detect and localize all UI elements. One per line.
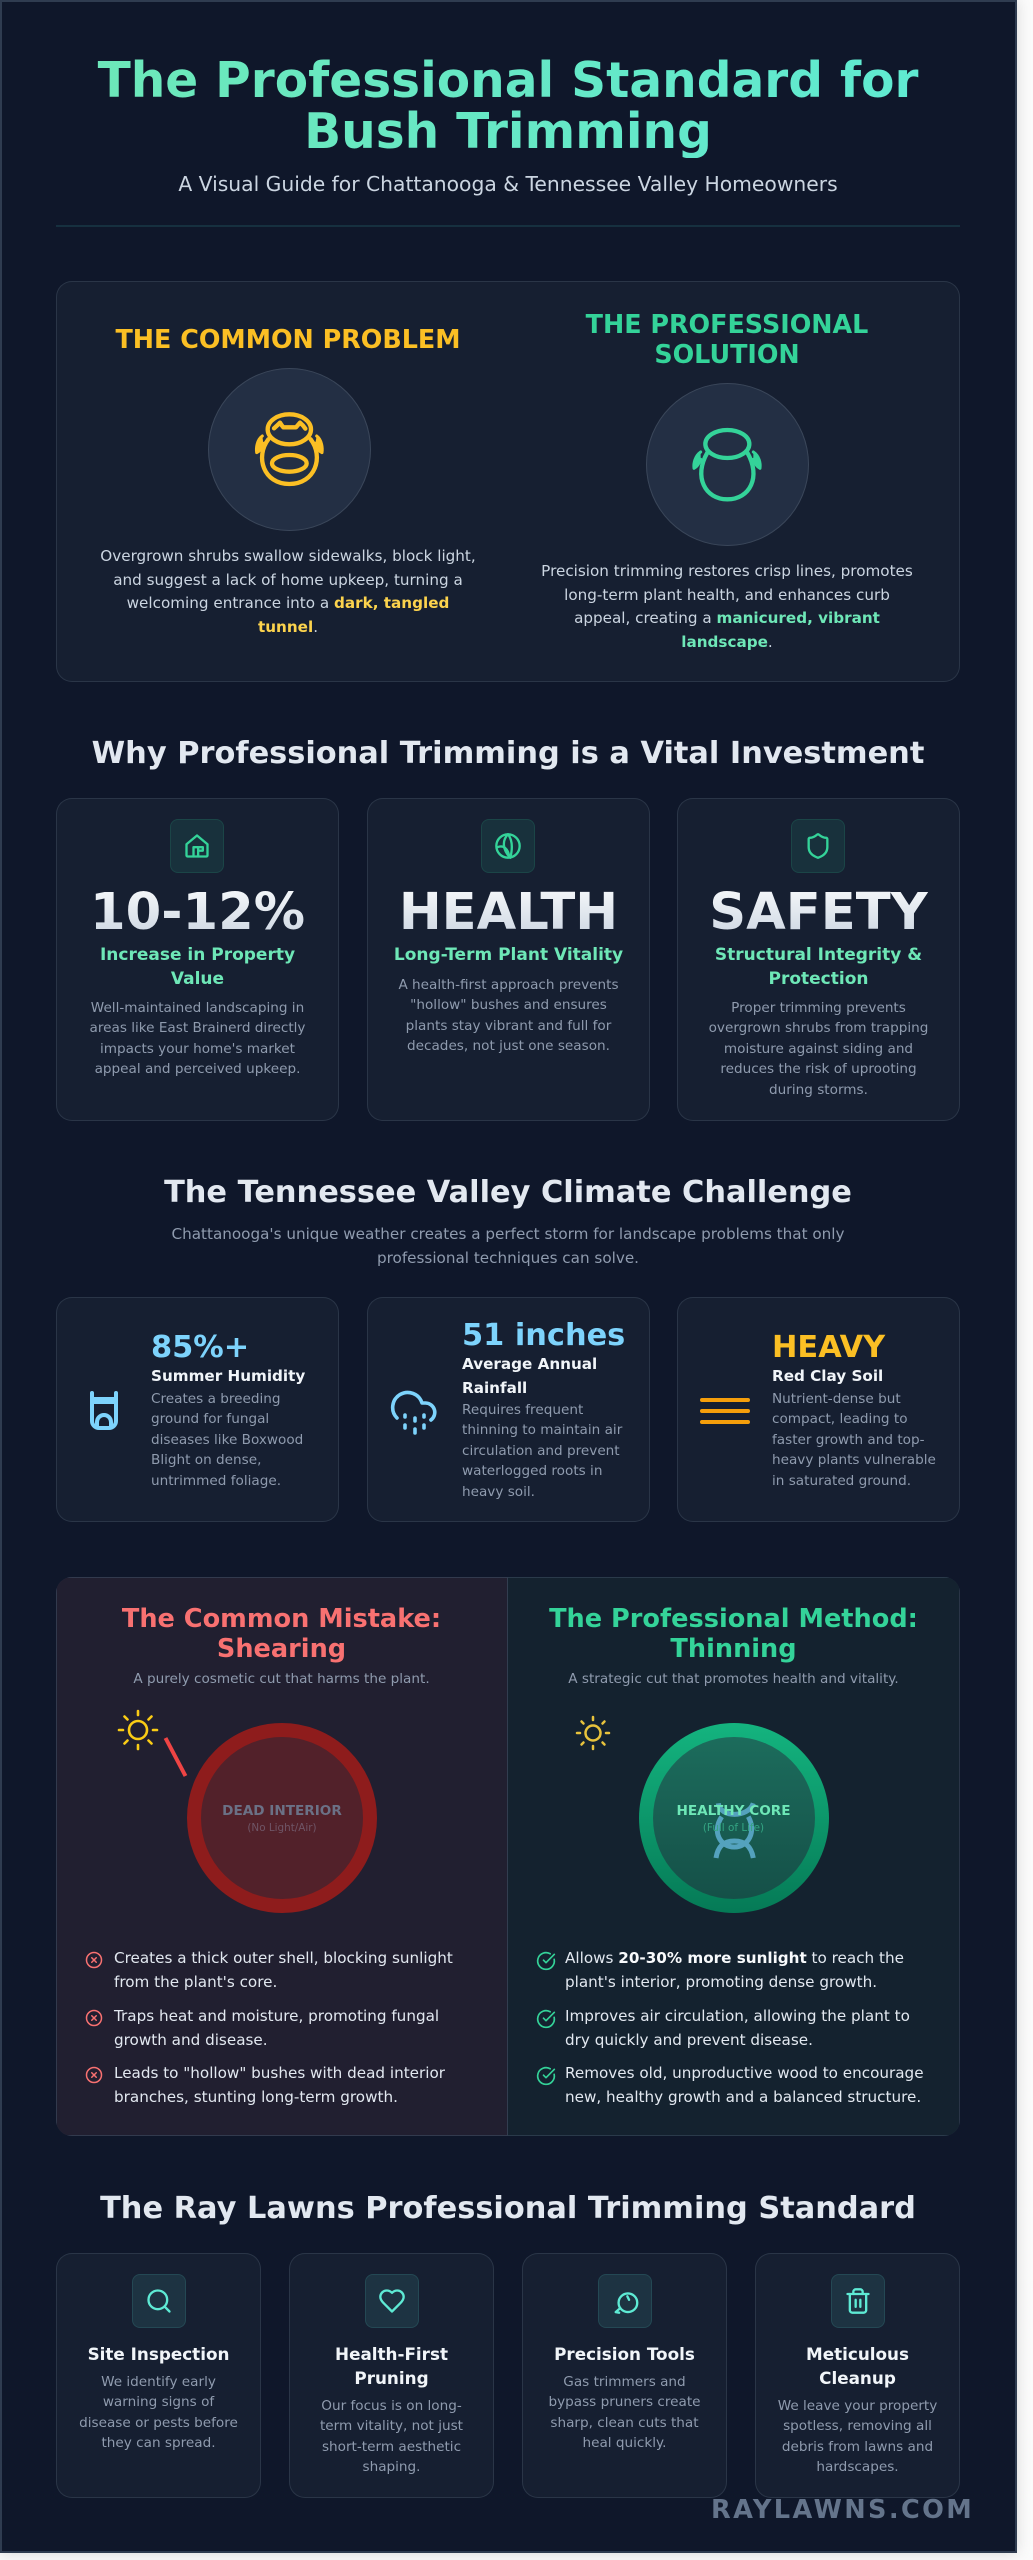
text: problem description: and suggest a lack of home upkeep, turning a (113, 571, 463, 589)
description (522, 2372, 727, 2454)
card: health (367, 798, 650, 1121)
description (398, 977, 619, 1054)
text: growth and disease. (114, 2030, 268, 2048)
icon: x (86, 1952, 102, 1968)
text (114, 2006, 439, 2048)
label: Structural Integrity & (715, 945, 922, 965)
panel: shearing vs thinning (56, 1577, 960, 2136)
description: warning signs of (103, 2394, 214, 2410)
description (709, 1000, 928, 1098)
text: solution description: landscape. (681, 633, 773, 651)
diagram sublabel: (Full of Life) (703, 1822, 764, 1834)
card: health-first pruning (289, 2253, 494, 2498)
description: bypass pruners create (548, 2394, 701, 2410)
item (86, 2064, 445, 2106)
icon: humidity (90, 1391, 118, 1430)
text: branches, stunting long-term growth. (114, 2088, 398, 2106)
text (114, 2064, 445, 2106)
label: Protection (768, 969, 868, 989)
item (536, 2064, 924, 2106)
icon: open branches (714, 1802, 756, 1858)
text: Removes old, unproductive wood to encourage (565, 2064, 924, 2082)
icon: check (536, 2066, 556, 2086)
icon: house (170, 819, 224, 873)
heading: thinning: Thinning (670, 1634, 797, 1664)
label: Rainfall (462, 1379, 527, 1397)
text: Creates a thick outer shell, blocking sunlight (114, 1949, 453, 1967)
description: shaping. (362, 2459, 420, 2475)
label: Precision Tools (554, 2344, 695, 2364)
text: problem description: tunnel. (258, 618, 318, 636)
description: decades, not just one season. (407, 1038, 610, 1054)
heading: climate challenge: The Tennessee Valley Climate Challenge (164, 1175, 852, 1210)
description (151, 1391, 303, 1489)
diagram label: DEAD INTERIOR (222, 1803, 342, 1819)
text: problem description: welcoming entrance into a dark, tangled (127, 594, 449, 612)
label: Value (171, 969, 224, 989)
subtitle: A purely cosmetic cut that harms the plant. (133, 1671, 430, 1687)
description (90, 1000, 305, 1077)
subtitle: A strategic cut that promotes health and vitality. (568, 1671, 899, 1687)
label: Increase in Property (100, 945, 295, 965)
heading: why professional trimming: Why Professional Trimming is a Vital Investment (92, 736, 924, 771)
icon: search (132, 2274, 186, 2328)
icon: leaf (481, 819, 535, 873)
description: compact, leading to (772, 1411, 908, 1427)
stat: 51 inches: 51 inches (462, 1318, 625, 1353)
text: climate intro: Chattanooga's unique weather creates a perfect storm for landscape problems that only (172, 1225, 844, 1243)
panel: problem vs solution (56, 281, 960, 682)
diagram: dead interior (187, 1723, 377, 1913)
description (755, 2396, 960, 2478)
diagram sublabel: (No Light/Air) (247, 1822, 317, 1834)
description: debris from lawns and (782, 2439, 933, 2455)
card: precision tools (522, 2253, 727, 2498)
heading: the professional solution: SOLUTION (654, 339, 800, 369)
description: heavy soil. (462, 1484, 535, 1500)
icon: trash (831, 2274, 885, 2328)
description: impacts your home's market (100, 1041, 295, 1057)
stat: 10-12%: 10-12% (90, 882, 305, 942)
description: We leave your property (778, 2398, 937, 2414)
label (715, 945, 922, 989)
label: Long-Term Plant Vitality (394, 945, 623, 965)
icon: soil layers (700, 1398, 750, 1424)
heading: shearing: The Common Mistake: (122, 1604, 441, 1634)
card: site inspection (56, 2253, 261, 2498)
card: rainfall (367, 1297, 650, 1522)
description (772, 1391, 936, 1489)
item (86, 2006, 439, 2048)
text (114, 1949, 453, 1991)
icon: check (536, 2010, 556, 2028)
description: short-term aesthetic (322, 2439, 461, 2455)
description: Our focus is on long- (321, 2398, 462, 2414)
label: Summer Humidity (151, 1367, 305, 1385)
heading: the professional solution (586, 309, 868, 369)
description: faster growth and top- (772, 1432, 924, 1448)
heading: shearing (122, 1604, 441, 1664)
heading: ray lawns standard: The Ray Lawns Professional Trimming Standard (100, 2191, 916, 2226)
description: during storms. (769, 1082, 868, 1098)
heading: shearing: Shearing (217, 1634, 346, 1664)
item (536, 1949, 904, 1991)
icon: overgrown bush (208, 368, 371, 531)
description: circulation and prevent (462, 1443, 620, 1459)
title: Bush Trimming (304, 104, 712, 160)
description: "hollow" bushes and ensures (410, 997, 607, 1013)
label: Cleanup (819, 2368, 896, 2388)
stat: health: HEALTH (399, 882, 618, 942)
description: overgrown shrubs from trapping (709, 1020, 928, 1036)
text: Traps heat and moisture, promoting fungal (114, 2006, 439, 2024)
card: safety (677, 798, 960, 1121)
text: solution description (541, 562, 913, 651)
text (565, 1949, 904, 1991)
icon: precision gauge (598, 2274, 652, 2328)
text: climate intro (172, 1225, 844, 1266)
description: Blight on dense, (151, 1452, 261, 1468)
heading: thinning (549, 1604, 918, 1664)
description: ground for fungal (151, 1411, 269, 1427)
description: hardscapes. (816, 2459, 899, 2475)
title: The Professional Standard for (98, 53, 918, 109)
icon: sun blocked by cut line (118, 1710, 188, 1777)
description: areas like East Brainerd directly (90, 1020, 305, 1036)
label: Meticulous (806, 2344, 909, 2364)
description: heal quickly. (582, 2435, 666, 2451)
diagram label: HEALTHY CORE (676, 1803, 791, 1819)
subtitle: A Visual Guide for Chattanooga & Tennessee Valley Homeowners (178, 172, 838, 196)
description: diseases like Boxwood (151, 1432, 303, 1448)
description: waterlogged roots in (462, 1463, 602, 1479)
text: new, healthy growth and a balanced structure. (565, 2088, 921, 2106)
description: sharp, clean cuts that (550, 2415, 699, 2431)
card: humidity (56, 1297, 339, 1522)
label (462, 1355, 597, 1397)
heading: the common problem: THE COMMON PROBLEM (115, 324, 461, 354)
description: We identify early (101, 2374, 216, 2390)
text: problem description (100, 547, 476, 636)
brand watermark: RAYLAWNS.COM (711, 2495, 974, 2525)
label (100, 945, 295, 989)
core (652, 1737, 814, 1899)
heading: the professional solution: THE PROFESSIONAL (586, 309, 868, 339)
label: Pruning (354, 2368, 429, 2388)
description: Well-maintained landscaping in (91, 1000, 304, 1016)
label: Health-First (335, 2344, 448, 2364)
description: plants stay vibrant and full for (406, 1018, 611, 1034)
icon: rain cloud (390, 1390, 437, 1435)
text: problem description: Overgrown shrubs swallow sidewalks, block light, (100, 547, 476, 565)
description: Gas trimmers and (563, 2374, 686, 2390)
title (0, 56, 1016, 158)
card: soil (677, 1297, 960, 1522)
card: meticulous cleanup (755, 2253, 960, 2498)
label (289, 2342, 494, 2390)
description: moisture against siding and (724, 1041, 913, 1057)
heading: thinning: The Professional Method: (549, 1604, 918, 1634)
label (755, 2342, 960, 2390)
description (289, 2396, 494, 2478)
icon: sun (576, 1716, 610, 1750)
description: they can spread. (101, 2435, 216, 2451)
description (462, 1402, 622, 1500)
label: Average Annual (462, 1355, 597, 1373)
icon: x (86, 2066, 102, 2084)
text (565, 2061, 924, 2109)
description: Creates a breeding (151, 1391, 281, 1407)
list: shearing harms (86, 1949, 453, 2106)
text: from the plant's core. (114, 1973, 277, 1991)
description: heavy plants vulnerable (772, 1452, 936, 1468)
item (86, 1949, 453, 1991)
list: thinning benefits (536, 1949, 924, 2106)
description: Requires frequent (462, 1402, 583, 1418)
description (56, 2372, 261, 2454)
stat: heavy: HEAVY (772, 1330, 885, 1365)
description: spotless, removing all (783, 2418, 932, 2434)
icon: trimmed bush (646, 383, 809, 546)
card: property value (56, 798, 339, 1121)
icon: x (86, 2010, 102, 2026)
text: dry quickly and prevent disease. (565, 2030, 813, 2048)
stat: 85%+: 85%+ (151, 1330, 249, 1365)
text: Improves air circulation, allowing the plant to (565, 2006, 910, 2024)
description: disease or pests before (79, 2415, 238, 2431)
text (565, 2006, 910, 2048)
label: Red Clay Soil (772, 1367, 883, 1385)
text: solution description: appeal, creating a manicured, vibrant (574, 609, 880, 627)
text: climate intro: professional techniques can solve. (377, 1248, 639, 1266)
text: solution description: Precision trimming restores crisp lines, promotes (541, 562, 913, 580)
header: title and subtitle (98, 53, 918, 196)
icon: check (536, 1952, 556, 1970)
description: A health-first approach prevents (398, 977, 619, 993)
column: professional method thinning (507, 1577, 960, 2136)
icon: heart (365, 2274, 419, 2328)
description: appeal and perceived upkeep. (95, 1061, 300, 1077)
column: common mistake shearing (56, 1577, 508, 2136)
icon: shield (791, 819, 845, 873)
item (536, 2006, 910, 2048)
text: plant's interior, promoting dense growth. (565, 1973, 877, 1991)
description: in saturated ground. (772, 1473, 911, 1489)
text: solution description: long-term plant health, and enhances curb (564, 586, 890, 604)
diagram: healthy core (638, 1723, 828, 1913)
stat: safety: SAFETY (709, 882, 928, 942)
text: Leads to "hollow" bushes with dead interior (114, 2064, 445, 2082)
description: thinning to maintain air (462, 1422, 622, 1438)
text: Allows 20-30% more sunlight to reach the (565, 1949, 904, 1967)
description: untrimmed foliage. (151, 1473, 281, 1489)
description: reduces the risk of uprooting (720, 1061, 917, 1077)
description: Proper trimming prevents (731, 1000, 906, 1016)
description: term vitality, not just (320, 2418, 463, 2434)
label: Site Inspection (88, 2344, 229, 2364)
description: Nutrient-dense but (772, 1391, 901, 1407)
